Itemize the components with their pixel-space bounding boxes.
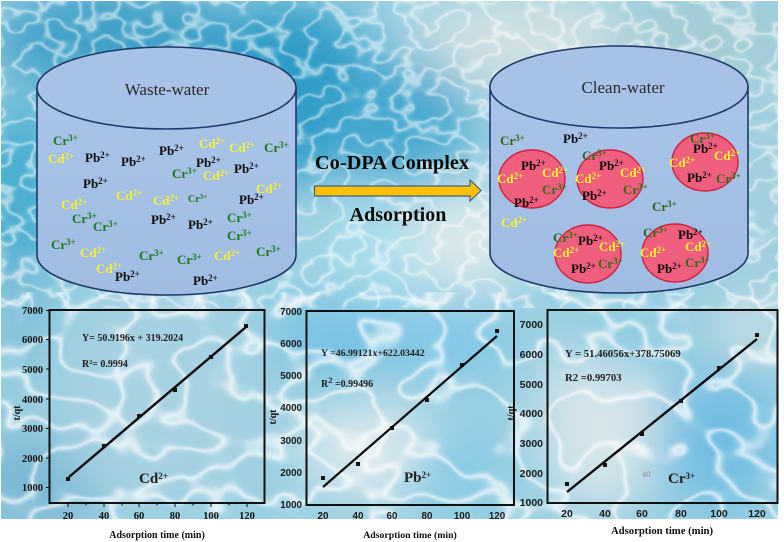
waste-water ions: Cr <box>227 210 242 225</box>
waste-water tank lid <box>37 47 296 129</box>
waste-water ions: Cd <box>199 136 216 151</box>
fit line Cr <box>567 339 757 492</box>
waste-water ions: Cd <box>61 197 78 212</box>
clean-water ions: 3+ <box>658 225 668 235</box>
r squared Cd: 2 <box>89 360 92 366</box>
waste-water ions: Pb <box>193 273 208 288</box>
waste-water ions: 2+ <box>98 176 108 186</box>
chart: Cd2+ adsorption kinetics: 1000 <box>22 483 43 494</box>
waste-water ions: 2+ <box>130 269 140 279</box>
waste-water ions: Cr <box>139 248 154 263</box>
waste-water ions: 2+ <box>249 161 259 171</box>
waste-water ions: Pb <box>121 154 136 169</box>
chart: Cd2+ adsorption kinetics: 3000 <box>22 424 43 435</box>
clean-water label: Clean-water <box>581 78 665 97</box>
clean-water ions: Pb <box>521 158 536 173</box>
waste-water ions: 3+ <box>154 248 164 258</box>
chart: Cr3+ adsorption kinetics: 1000 <box>520 497 543 509</box>
clean-water ions: Pb <box>678 227 693 242</box>
waste-water ions: Pb <box>234 161 249 176</box>
chart: Cr3+ adsorption kinetics: 40 <box>599 508 611 520</box>
waste-water ions: Cr <box>256 244 271 259</box>
chart: Pb2+ adsorption kinetics: 1000 <box>280 500 303 511</box>
waste-water ions: 3+ <box>87 211 97 221</box>
clean-water ions: Pb <box>571 261 586 276</box>
ion label Cd: 2+ <box>158 471 168 481</box>
waste-water ions: 3+ <box>200 193 207 201</box>
chart: Cd2+ adsorption kinetics: 40 <box>99 511 109 522</box>
chart: Cd2+ adsorption kinetics <box>12 306 264 541</box>
waste-water ions: Cr <box>93 219 108 234</box>
chart: Cr3+ adsorption kinetics: 120 <box>748 508 766 520</box>
waste-water ions: Cr <box>51 237 66 252</box>
y axis label Pb: t/qt <box>268 409 279 424</box>
clean-water ions: Cd <box>542 165 559 180</box>
chart: Pb2+ adsorption kinetics: 7000 <box>280 307 303 318</box>
clean-water ions: 3+ <box>515 133 525 143</box>
waste-water ions: 2+ <box>133 188 142 198</box>
clean-water ions: 2+ <box>708 141 718 151</box>
waste-water ions: Cd <box>48 151 65 166</box>
clean-water ions: Pb <box>687 170 702 185</box>
clean-water ions: 2+ <box>686 155 695 165</box>
chart: Cd2+ adsorption kinetics: 2000 <box>22 454 43 465</box>
heading above arrow: Co-DPA Complex: Co-DPA Complex <box>315 152 470 174</box>
x axis label Cr: Adsorption time (min) <box>611 525 713 537</box>
chart: Cd2+ adsorption kinetics: 80 <box>170 511 180 522</box>
waste-water ions: Cr <box>177 252 192 267</box>
chart: Pb2+ adsorption kinetics: 20 <box>318 511 329 522</box>
clean-water ions: Cr <box>643 225 658 240</box>
chart: Pb2+ adsorption kinetics: 5000 <box>280 371 303 382</box>
r squared Cd: = 0.9994 <box>92 359 128 370</box>
stray 40 label: 40 <box>642 469 650 479</box>
clean-water ions: Cr <box>685 255 700 270</box>
waste-water ions: Cr <box>264 140 279 155</box>
clean-water ions: 2+ <box>702 239 711 249</box>
waste-water ions: Cd <box>203 168 220 183</box>
clean-water ions: Cr <box>623 182 638 197</box>
waste-water ions: 3+ <box>108 219 118 229</box>
clean-water ions: 2+ <box>693 227 703 237</box>
clean-water ions: 2+ <box>586 261 596 271</box>
caustic ripples: upper water <box>0 0 784 308</box>
clean-water ions: Cd <box>620 165 637 180</box>
waste-water ions: 2+ <box>246 140 255 150</box>
waste-water ions: 2+ <box>231 248 240 258</box>
clean-water ions: Cr <box>582 148 597 163</box>
chart: Cr3+ adsorption kinetics: 80 <box>675 508 687 520</box>
chart: Pb2+ adsorption kinetics: 2000 <box>280 468 303 479</box>
equation Cd: Y= 50.9196x + 319.2024 <box>82 333 183 344</box>
clean-water ions: Cr <box>500 133 515 148</box>
clean-water ions: Cr <box>553 230 568 245</box>
waste-water ions: 2+ <box>211 155 221 165</box>
waste-water ions: 3+ <box>66 237 76 247</box>
clean-water ions: Cd <box>497 171 514 186</box>
chart: Cr3+ adsorption kinetics <box>506 310 778 537</box>
ion label Cd: Cd <box>139 471 158 487</box>
data points Cr <box>565 333 759 486</box>
equation Pb: Y =46.99121x+622.03442 <box>321 348 425 359</box>
waste-water cylinder tank <box>37 47 296 295</box>
waste-water ions: Cd <box>80 245 97 260</box>
waste-water ions: Cd <box>153 193 170 208</box>
clean-water tank lid <box>490 46 748 128</box>
waste-water ions: 2+ <box>65 151 74 161</box>
red adsorbent particles <box>499 133 738 283</box>
clean-water ions: 2+ <box>616 239 625 249</box>
y axis label Cr: t/qt <box>506 405 517 420</box>
waste-water ions: Pb <box>159 143 174 158</box>
waste-water ions: Cd <box>229 140 246 155</box>
chart: Cr3+ adsorption kinetics: 4000 <box>520 408 543 420</box>
clean-water ions: 2+ <box>592 171 601 181</box>
clean-water ions: Pb <box>578 233 593 248</box>
clean-water ions: 2+ <box>514 171 523 181</box>
waste-water ions: 3+ <box>242 228 252 238</box>
clean-water ions: Cr <box>716 171 731 186</box>
r squared Pb: =0.99496 <box>332 379 373 390</box>
waste-water ions: 2+ <box>113 261 122 271</box>
clean-water ions: Pb <box>693 141 708 156</box>
clean-water ions: Cd <box>714 148 731 163</box>
waste-water ions: Cd <box>116 188 133 203</box>
chart: Cr3+ adsorption kinetics: 2000 <box>520 468 543 480</box>
data points Pb <box>321 329 499 480</box>
chart: Pb2+ adsorption kinetics: 40 <box>353 511 364 522</box>
clean-water ions: 2+ <box>702 170 712 180</box>
clean-water ions: 2+ <box>518 215 527 225</box>
waste-water ions: Cd <box>256 181 273 196</box>
waste-water ions: 2+ <box>100 150 110 160</box>
waste-water ions: 2+ <box>254 192 264 202</box>
chart: Cd2+ adsorption kinetics: 6000 <box>22 335 43 346</box>
clean-water ions: 2+ <box>529 195 539 205</box>
clean-water ions: 2+ <box>597 188 607 198</box>
r squared Pb: R <box>321 379 328 390</box>
fit line Cd <box>69 327 246 477</box>
clean-water ions: 3+ <box>731 171 741 181</box>
chart: Cd2+ adsorption kinetics: 7000 <box>22 306 43 317</box>
clean-water ions: Pb <box>599 158 614 173</box>
waste-water ions: 3+ <box>187 166 197 176</box>
waste-water ions: 3+ <box>192 252 202 262</box>
chart: Cd2+ adsorption kinetics: 100 <box>203 511 219 522</box>
chart: Pb2+ adsorption kinetics <box>268 307 514 541</box>
waste-water ions: 2+ <box>166 212 176 222</box>
clean-water ions: 2+ <box>536 158 546 168</box>
clean-water ions: 2+ <box>578 131 588 141</box>
waste-water ions: Pb <box>188 217 203 232</box>
chart: Cd2+ adsorption kinetics: 60 <box>134 511 144 522</box>
waste-water ions: 2+ <box>136 154 146 164</box>
clean-water ions: Cd <box>685 239 702 254</box>
chart: Cr3+ adsorption kinetics: 7000 <box>520 319 543 331</box>
clean-water ions: 2+ <box>657 245 666 255</box>
ion label Cr: 3+ <box>686 471 695 481</box>
r squared Pb: 2 <box>328 375 332 385</box>
waste-water ions: Pb <box>115 269 130 284</box>
clean-water ions: 3+ <box>705 131 715 141</box>
clean-water ions: 2+ <box>559 165 568 175</box>
chart: Cr3+ adsorption kinetics: 5000 <box>520 379 543 391</box>
clean-water ions: Cr <box>652 199 667 214</box>
clean-water ions: 2+ <box>672 261 682 271</box>
chart: Pb2+ adsorption kinetics: 80 <box>422 511 433 522</box>
chart: Pb2+ adsorption kinetics: 6000 <box>280 339 303 350</box>
clean-water ions: 2+ <box>637 165 646 175</box>
clean-water ions: Cr <box>690 131 705 146</box>
chart: Cr3+ adsorption kinetics: 100 <box>710 508 728 520</box>
waste-water ions: Pb <box>85 150 100 165</box>
waste-water ions: 2+ <box>208 273 218 283</box>
waste-water label: Waste-water <box>125 80 210 99</box>
waste-water ions: 2+ <box>170 193 179 203</box>
waste-water ions: Pb <box>239 192 254 207</box>
chart: Cr3+ adsorption kinetics: 3000 <box>520 438 543 450</box>
waste-water ions: Cd <box>214 248 231 263</box>
clean-water ions: Pb <box>582 188 597 203</box>
clean-water ions: 3+ <box>700 255 710 265</box>
caustic ripples: lower water <box>0 292 784 520</box>
fit line Pb <box>323 336 497 487</box>
clean-water ions: 3+ <box>597 148 607 158</box>
chart: Cr3+ adsorption kinetics: 6000 <box>520 349 543 361</box>
clean-water ions: 2+ <box>731 148 740 158</box>
waste-water ions <box>48 133 289 288</box>
clean-water ions: Cd <box>599 239 616 254</box>
clean-water ions: Cd <box>501 215 518 230</box>
clean-water ions: Cd <box>640 245 657 260</box>
waste-water ions: 3+ <box>279 140 289 150</box>
clean-water ions: Cd <box>669 155 686 170</box>
arrow <box>314 180 481 201</box>
clean-water ions <box>497 131 741 276</box>
chart: Cd2+ adsorption kinetics: 120 <box>239 511 255 522</box>
waste-water ions: Cr <box>188 194 200 205</box>
x axis label Cd: Adsorption time (min) <box>109 530 205 541</box>
waste-water ions: 3+ <box>271 244 281 254</box>
waste-water ions: 3+ <box>242 210 252 220</box>
waste-water ions: Pb <box>151 212 166 227</box>
waste-water ions: Cd <box>96 261 113 276</box>
waste-water ions: 3+ <box>68 133 78 143</box>
clean-water ions: Pb <box>657 261 672 276</box>
waste-water ions: Cr <box>172 166 187 181</box>
clean-water ions: 2+ <box>570 245 579 255</box>
waste-water ions: 2+ <box>216 136 225 146</box>
ion label Pb: Pb <box>404 470 422 486</box>
clean-water ions: 3+ <box>568 230 578 240</box>
chart: Pb2+ adsorption kinetics: 4000 <box>280 403 303 414</box>
clean-water ions: 3+ <box>638 182 648 192</box>
label below arrow: Adsorption: Adsorption <box>350 204 446 226</box>
ion label Cr: Cr <box>668 471 686 487</box>
clean-water ions: Pb <box>514 195 529 210</box>
y axis label Cd: t/qt <box>12 405 23 420</box>
chart: Pb2+ adsorption kinetics: 3000 <box>280 436 303 447</box>
waste-water ions: Cr <box>72 211 87 226</box>
waste-water ions: 2+ <box>203 217 213 227</box>
waste-water ions: Pb <box>196 155 211 170</box>
clean-water ions: Cd <box>575 171 592 186</box>
waste-water ions: 2+ <box>78 197 87 207</box>
ion label Pb: 2+ <box>422 470 431 480</box>
chart: Cr3+ adsorption kinetics: 60 <box>636 508 648 520</box>
r squared Cd: R <box>82 359 89 370</box>
clean-water cylinder tank <box>490 46 748 293</box>
equation Cr: Y = 51.46056x+378.75069 <box>565 348 681 360</box>
waste-water ions: 2+ <box>174 143 184 153</box>
chart: Pb2+ adsorption kinetics: 60 <box>387 511 398 522</box>
clean-water ions: Pb <box>563 131 578 146</box>
data points Cd <box>66 324 248 481</box>
chart: Cd2+ adsorption kinetics: 4000 <box>22 395 43 406</box>
r squared Cr: R2 =0.99703 <box>565 372 622 384</box>
clean-water ions: 2+ <box>593 233 603 243</box>
chart: Cr3+ adsorption kinetics: 20 <box>561 508 573 520</box>
waste-water ions: Cr <box>53 133 68 148</box>
clean-water ions: 3+ <box>557 182 567 192</box>
clean-water ions: 3+ <box>667 199 677 209</box>
waste-water ions: Pb <box>83 176 98 191</box>
x axis label Pb: Adsorption time (min) <box>363 530 457 541</box>
chart: Pb2+ adsorption kinetics: 120 <box>489 511 506 522</box>
chart: Cd2+ adsorption kinetics: 5000 <box>22 365 43 376</box>
clean-water ions: 2+ <box>614 158 624 168</box>
clean-water ions: Cd <box>553 245 570 260</box>
chart: Pb2+ adsorption kinetics: 100 <box>454 511 471 522</box>
waste-water ions: 2+ <box>97 245 106 255</box>
chart: Cd2+ adsorption kinetics: 20 <box>63 511 73 522</box>
waste-water ions: 2+ <box>273 181 282 191</box>
clean-water ions: Cr <box>542 182 557 197</box>
clean-water ions: Cr <box>598 256 613 271</box>
waste-water ions: 2+ <box>220 168 229 178</box>
clean-water ions: 3+ <box>613 256 623 266</box>
waste-water ions: Cr <box>227 228 242 243</box>
